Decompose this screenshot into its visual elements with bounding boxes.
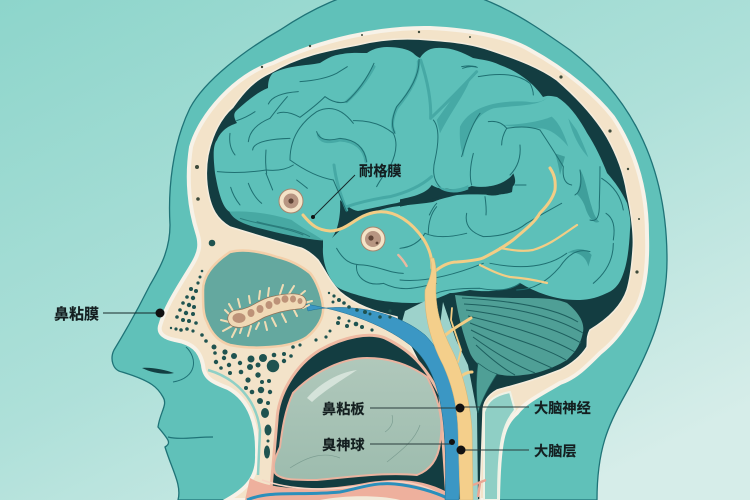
lower throat tissue [245,478,447,500]
nasal sinus [203,250,323,348]
olfactory bacterium [221,285,312,337]
sulci: parietal, occipital and temporal [400,66,623,295]
cerebellum [455,295,583,413]
skull pores [195,31,640,274]
orbital gyrus [229,211,323,241]
olfactory nerve (blue) [306,304,460,500]
nostril [142,368,174,374]
label: 鼻粘膜: 鼻粘膜 [54,305,99,323]
temporal lobe sulci [337,248,437,289]
pink branch [473,480,486,497]
label: 臭神球: 臭神球 [322,437,365,454]
lower cavity around palate [270,335,447,500]
cranial nerve (yellow) [303,168,577,380]
neuron left [279,189,303,213]
mouth line [168,437,213,438]
label: 耐格膜 [311,163,402,219]
skull and nasal bone [160,28,647,500]
head skin silhouette [112,0,667,500]
label: 臭神球 [322,437,455,454]
label: 鼻粘膜 [54,305,164,323]
neuron right [361,227,385,251]
main dark cavity [206,39,633,500]
light spinal canal strip right [440,302,478,500]
label: 鼻粘板 [322,401,460,418]
face details [142,347,260,475]
throat band [208,370,260,475]
label: 鼻粘板: 鼻粘板 [322,401,365,418]
blob highlight [307,370,357,402]
neck tissue [484,392,515,500]
nose wing [173,347,194,382]
brainstem [476,363,497,413]
palate blob [274,358,442,480]
label: 大脑神经: 大脑神经 [534,400,591,417]
sulci: frontal [217,59,490,233]
brain [214,47,630,303]
label: 耐格膜: 耐格膜 [359,163,402,180]
frontal-temporal fissure [332,177,514,238]
neurons [279,189,385,251]
label: 大脑层 [456,443,577,460]
light spinal canal strip [400,301,452,385]
label: 大脑层: 大脑层 [534,443,577,460]
spinal nerve trunk [425,258,473,500]
sinus bone pores [170,240,392,458]
brain body [214,47,630,303]
label: 大脑神经 [456,400,591,417]
